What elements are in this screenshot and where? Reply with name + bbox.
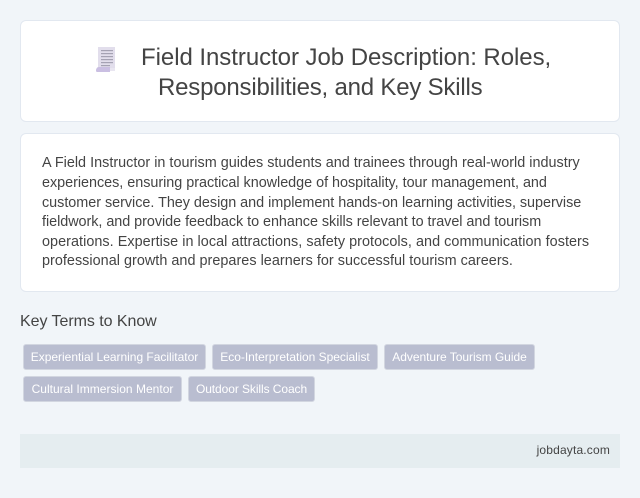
heading: Responsibilities, and Key Skills (158, 74, 482, 101)
icon: document scroll (96, 47, 115, 72)
tag (188, 376, 315, 402)
tag list (23, 344, 535, 402)
footer bar (20, 434, 620, 468)
panel: description card (20, 133, 620, 292)
tag: Cultural Immersion Mentor (32, 382, 173, 396)
footer text: jobdayta.com (537, 443, 610, 457)
heading: key terms: Key Terms to Know (20, 313, 157, 330)
text block: description (42, 155, 589, 269)
tag: Outdoor Skills Coach (196, 382, 307, 396)
tag: Eco-Interpretation Specialist (220, 350, 370, 364)
text block: description: professional growth and prepares learners for successful tourism careers. (42, 253, 513, 269)
text block: description: operations. Expertise in local attractions, safety protocols, and communication fosters (42, 234, 589, 250)
panel: title card (20, 20, 620, 122)
tag (384, 344, 535, 370)
tag (212, 344, 378, 370)
heading (141, 44, 551, 101)
tag: Adventure Tourism Guide (392, 350, 527, 364)
tag (23, 344, 206, 370)
text block: description: fieldwork, and provide feedback to enhance skills relevant to travel and tourism (42, 214, 541, 230)
tag: Experiential Learning Facilitator (31, 350, 198, 364)
heading: Field Instructor Job Description: Roles, (141, 44, 551, 71)
text block: description: experiences, ensuring practical knowledge of hospitality, tour management, and (42, 175, 547, 191)
tag (23, 376, 182, 402)
text block: description: A Field Instructor in tourism guides students and trainees through real-world industry (42, 155, 580, 171)
text block: description: customer service. They design and implement hands-on learning activities, supervise (42, 195, 581, 211)
